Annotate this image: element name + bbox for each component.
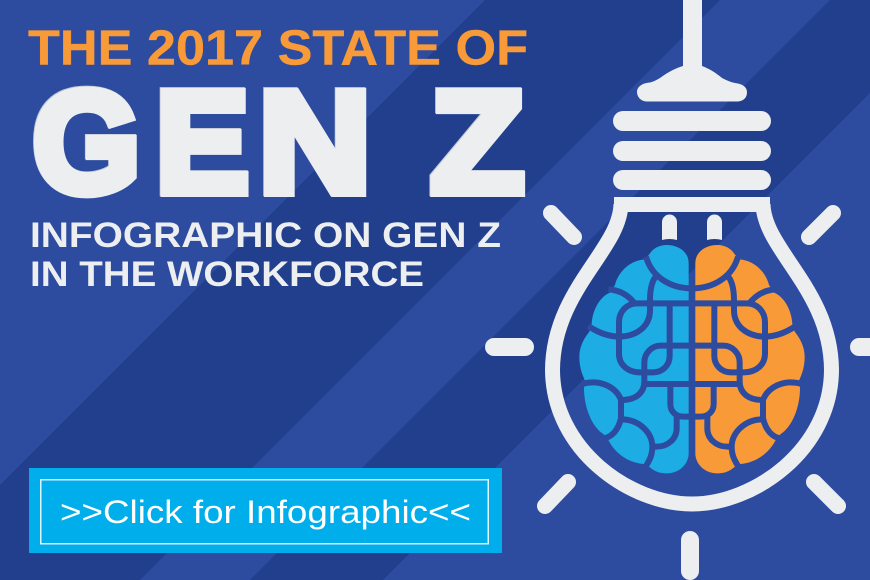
subtitle: INFOGRAPHIC ON GEN Z [30,216,501,255]
icon: filament stubs [662,215,722,240]
heading: GEN Z: E [156,63,249,223]
heading: GEN Z: Z [431,63,524,223]
button: click for infographic [29,468,502,553]
heading: GEN Z: N [259,61,371,223]
heading: GEN Z: G [33,61,141,223]
title: the 2017 state of: THE 2017 STATE OF [28,20,528,76]
subtitle: IN THE WORKFORCE [30,255,424,294]
heading: GEN Z [32,61,524,223]
heading: GEN Z: N [258,61,371,222]
subtitle [30,216,501,294]
icon: bulb glass outline [552,204,832,504]
icon: light rays [494,213,870,571]
icon: brain [579,245,805,473]
brain left hemisphere [579,245,692,473]
heading: GEN Z: G [32,61,140,222]
heading: GEN Z: E [155,62,248,223]
brain right hemisphere [692,245,805,473]
icon: light bulb cord and cap [637,0,747,102]
button: click for infographic: >>Click for Infographic<< [60,494,471,530]
heading: GEN Z: Z [430,62,523,222]
icon: bulb screw ribs [613,111,771,190]
